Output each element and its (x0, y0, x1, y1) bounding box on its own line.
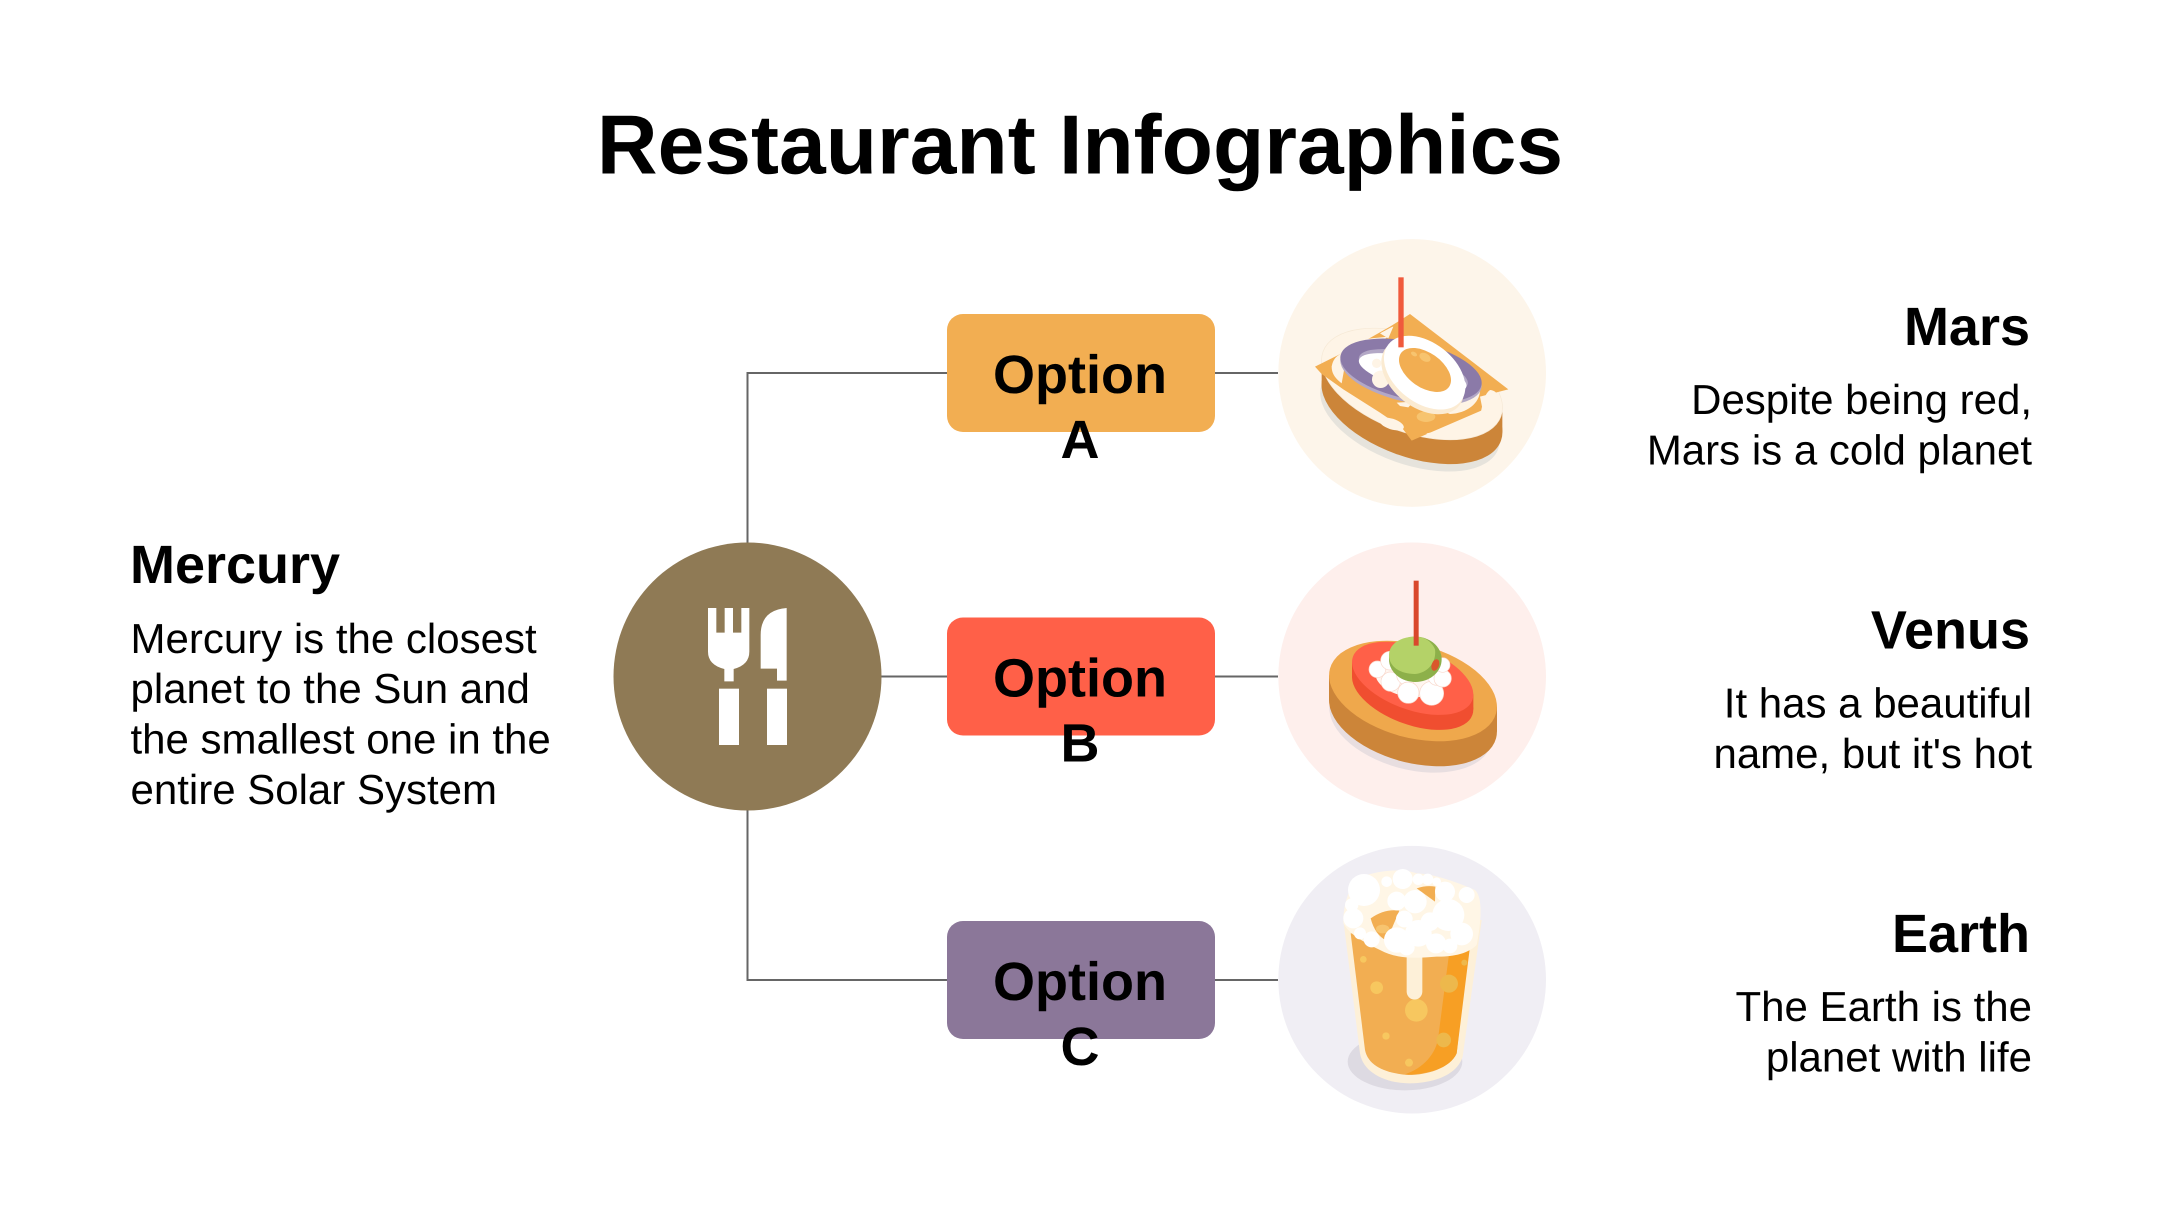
heading: Mars: Mars (1904, 297, 2030, 357)
panel: Earth text (1736, 904, 2032, 1080)
panel: Venus text (1713, 600, 2032, 777)
text block: Mars description: Despite being red, (1691, 376, 2032, 423)
text block: Mars description: Mars is a cold planet (1647, 426, 2032, 473)
connector lines (748, 373, 1278, 980)
icon: canape with tomato and olive (1278, 542, 1546, 810)
panel: Mars text (1647, 297, 2032, 473)
option B box: Option (993, 648, 1167, 708)
text block: Mercury description: Mercury is the closest (130, 615, 537, 662)
title: Restaurant Infographics (597, 98, 1563, 192)
text block: Mercury description: the smallest one in the (130, 716, 551, 763)
text block: Mercury description: planet to the Sun and (130, 665, 530, 712)
option B box: B (1060, 714, 1100, 774)
option A box: A (1060, 410, 1100, 470)
icon: fork and knife (708, 608, 787, 745)
heading: Earth: Earth (1892, 904, 2030, 964)
option C box (947, 921, 1215, 1077)
central hub with cutlery icon (614, 542, 882, 810)
heading: Mercury: Mercury (130, 535, 340, 595)
icon: open sandwich with egg and onion (1278, 239, 1546, 507)
option A box: Option (993, 345, 1167, 405)
panel: Mercury text (130, 535, 551, 813)
heading: Venus: Venus (1871, 600, 2030, 660)
text block: Venus description: name, but it's hot (1713, 730, 2032, 777)
text block: Mercury description: entire Solar System (130, 766, 497, 813)
text block: Earth description: planet with life (1766, 1033, 2032, 1080)
option B box (947, 618, 1215, 774)
option C box: Option (993, 952, 1167, 1012)
icon: glass of beer with foam (1278, 846, 1546, 1113)
option A box (947, 314, 1215, 470)
option C box: C (1060, 1017, 1100, 1077)
text block: Venus description: It has a beautiful (1724, 680, 2032, 726)
text block: Earth description: The Earth is the (1736, 983, 2032, 1030)
